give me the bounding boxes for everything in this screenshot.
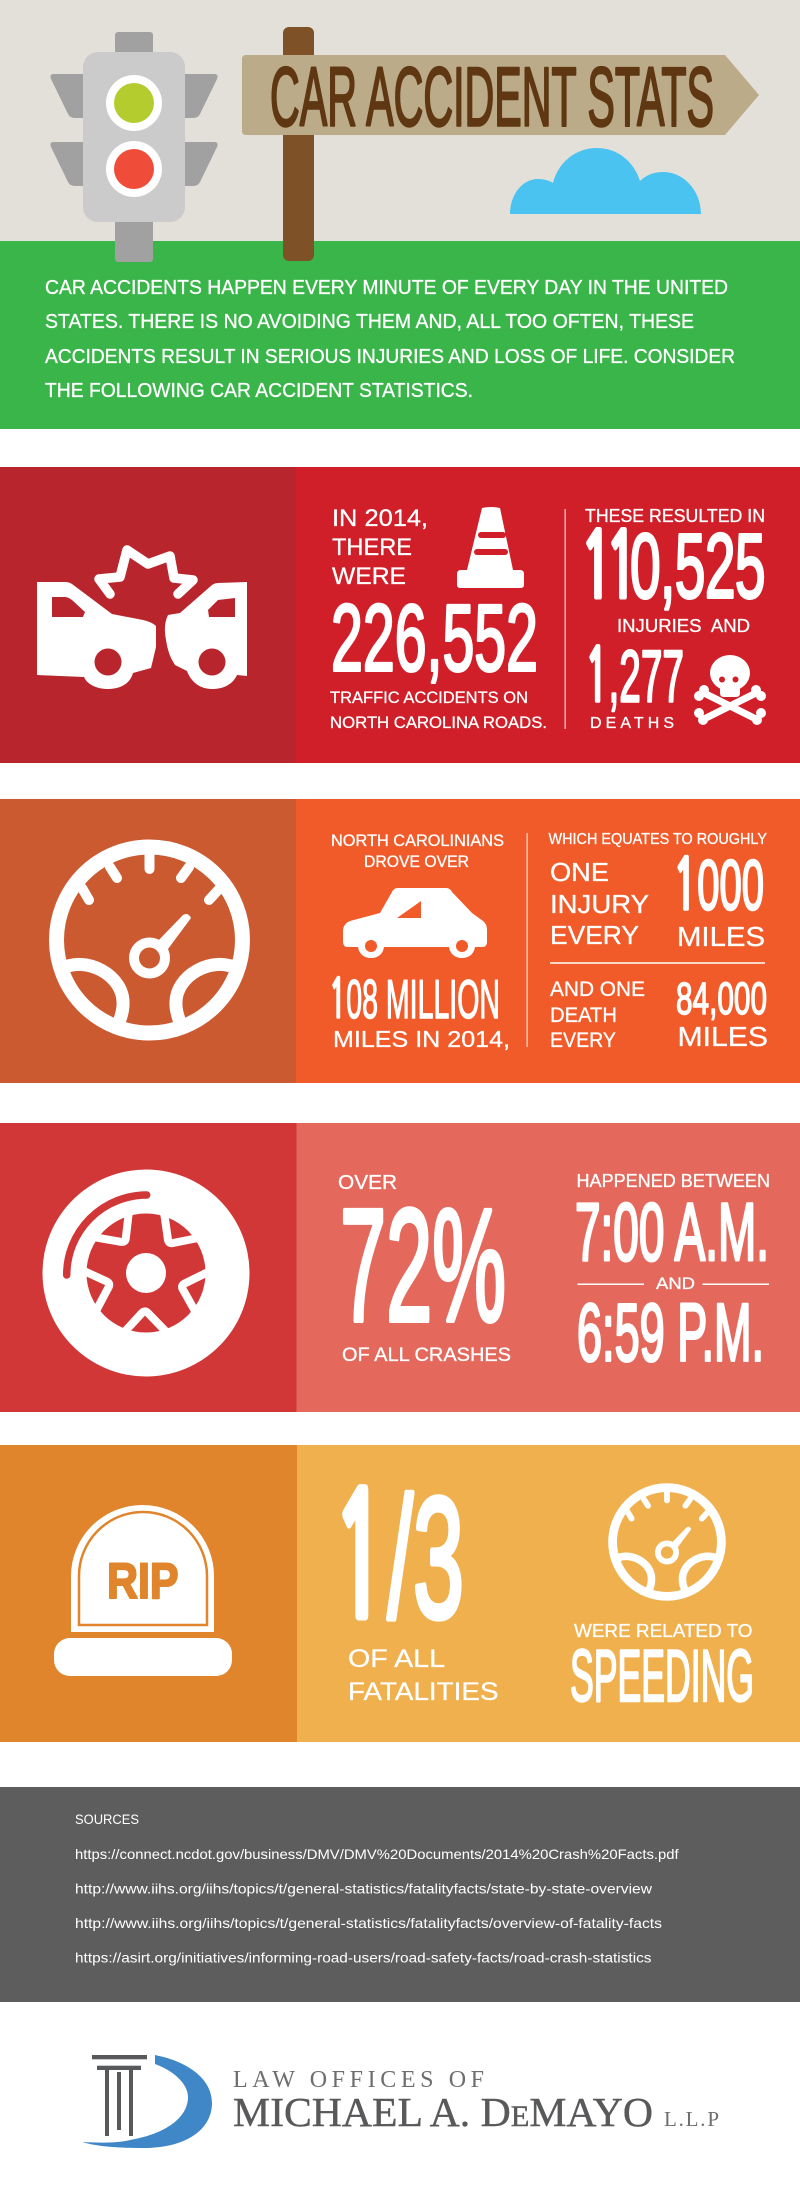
icon: speedometer	[56, 847, 242, 1033]
text: over: OVER	[338, 1171, 397, 1194]
text: north carolinians drove over: NORTH CAROLINIANS	[331, 832, 504, 850]
text: and one death every: DEATH	[550, 1004, 617, 1027]
stat: 84,000 miles	[676, 973, 768, 1052]
text: source links	[75, 1846, 679, 1966]
text: one injury every: ONE	[550, 857, 609, 887]
icon: traffic cone	[457, 507, 524, 588]
text: sources heading: SOURCES	[75, 1812, 139, 1827]
icon: skull and crossbones	[694, 655, 766, 725]
text: traffic accidents	[330, 688, 547, 732]
text: north carolinians drove over	[331, 832, 504, 871]
icon: wheel	[42, 1170, 250, 1376]
icon: traffic light	[50, 32, 218, 262]
text: of all fatalities	[348, 1645, 498, 1706]
text: of all fatalities: OF ALL	[348, 1645, 445, 1673]
text: one injury every: EVERY	[550, 920, 639, 950]
intro text: THE FOLLOWING CAR ACCIDENT STATISTICS.	[45, 379, 473, 402]
text: happened between: HAPPENED BETWEEN	[576, 1171, 770, 1191]
text: north carolinians drove over: DROVE OVER	[364, 853, 469, 871]
text: and one death every: AND ONE	[550, 978, 645, 1001]
text: source links: http://www.iihs.org/iihs/topics/t/general-statistics/fatalityfacts/overview-of-fatality-facts	[75, 1915, 662, 1931]
text: law offices of: LAW OFFICES OF	[233, 2067, 484, 2093]
icon: cloud	[510, 148, 701, 214]
icon: sign post	[283, 27, 314, 261]
text: source links: https://connect.ncdot.gov/business/DMV/DMV%20Documents/2014%20Crash%20Facts.pdf	[75, 1846, 679, 1862]
panel: fatalities and speeding	[0, 1445, 800, 1742]
stat: 1/3: 1/3	[332, 1463, 464, 1654]
icon: pillar and crescent	[82, 2055, 212, 2148]
logo: law offices	[82, 2055, 719, 2148]
intro text: STATES. THERE IS NO AVOIDING THEM AND, ALL TOO OFTEN, THESE	[45, 310, 694, 333]
stat: 1000 miles: MILES	[677, 921, 765, 952]
text: of all fatalities: FATALITIES	[348, 1678, 498, 1706]
text: and one death every	[550, 978, 645, 1052]
text: these resulted in: THESE RESULTED IN	[585, 506, 765, 526]
text: of all crashes: OF ALL CRASHES	[342, 1345, 511, 1366]
stat: 226,552: 226,552	[331, 586, 538, 692]
intro text: ACCIDENTS RESULT IN SERIOUS INJURIES AND LOSS OF LIFE. CONSIDER	[45, 345, 735, 368]
divider	[526, 833, 528, 1047]
panel: crash statistics	[0, 467, 800, 763]
stat: 72%: 72%	[340, 1176, 506, 1354]
text: and with rules: AND	[656, 1274, 695, 1293]
text: in 2014 there were	[332, 505, 428, 590]
text: deaths: DEATHS	[590, 715, 674, 732]
icon: tombstone: RIP	[107, 1553, 178, 1609]
icon: tombstone	[54, 1505, 232, 1676]
divider	[550, 962, 765, 964]
icon: car crash	[37, 550, 247, 689]
icon: car	[343, 888, 487, 958]
text: traffic accidents: TRAFFIC ACCIDENTS ON	[330, 688, 528, 707]
text: michael a. demayo: MICHAEL A. DEMAYO	[233, 2089, 653, 2135]
text: source links: http://www.iihs.org/iihs/topics/t/general-statistics/fatalityfacts/state-by-state-overview	[75, 1881, 653, 1897]
stat: 84,000 miles: MILES	[678, 1021, 768, 1052]
text: one injury every	[550, 857, 649, 950]
text: miles in 2014: MILES IN 2014,	[333, 1026, 510, 1052]
text: l.l.p: L.L.P	[664, 2107, 719, 2131]
panel: sources	[0, 1787, 800, 2002]
text: traffic accidents: NORTH CAROLINA ROADS.	[330, 713, 547, 732]
text: source links: https://asirt.org/initiatives/informing-road-users/road-safety-facts/road-crash-statistics	[75, 1950, 652, 1966]
stat: 108 million: 108 MILLION	[329, 969, 500, 1030]
intro text: CAR ACCIDENTS HAPPEN EVERY MINUTE OF EVERY DAY IN THE UNITED	[45, 276, 728, 299]
text: in 2014 there were: THERE	[332, 534, 412, 561]
text: were related to: WERE RELATED TO	[574, 1621, 752, 1641]
divider	[564, 509, 566, 729]
text: which equates to roughly: WHICH EQUATES TO ROUGHLY	[548, 831, 767, 848]
panel: intro band	[0, 241, 800, 429]
text: injuries and: INJURIES AND	[617, 616, 750, 636]
icon: small speedometer	[613, 1488, 721, 1596]
intro text	[45, 276, 735, 402]
panel: header sky	[0, 0, 800, 429]
icon: arrow sign	[242, 55, 759, 135]
panel: crash times	[0, 1123, 800, 1412]
text: in 2014 there were: IN 2014,	[332, 505, 428, 532]
text: and one death every: EVERY	[550, 1029, 616, 1052]
panel: miles driven	[0, 799, 800, 1083]
text: in 2014 there were: WERE	[332, 563, 406, 590]
stat: 1,277: 1,277	[585, 636, 684, 718]
stat: 1000 miles	[673, 846, 765, 952]
text: one injury every: INJURY	[550, 889, 649, 919]
